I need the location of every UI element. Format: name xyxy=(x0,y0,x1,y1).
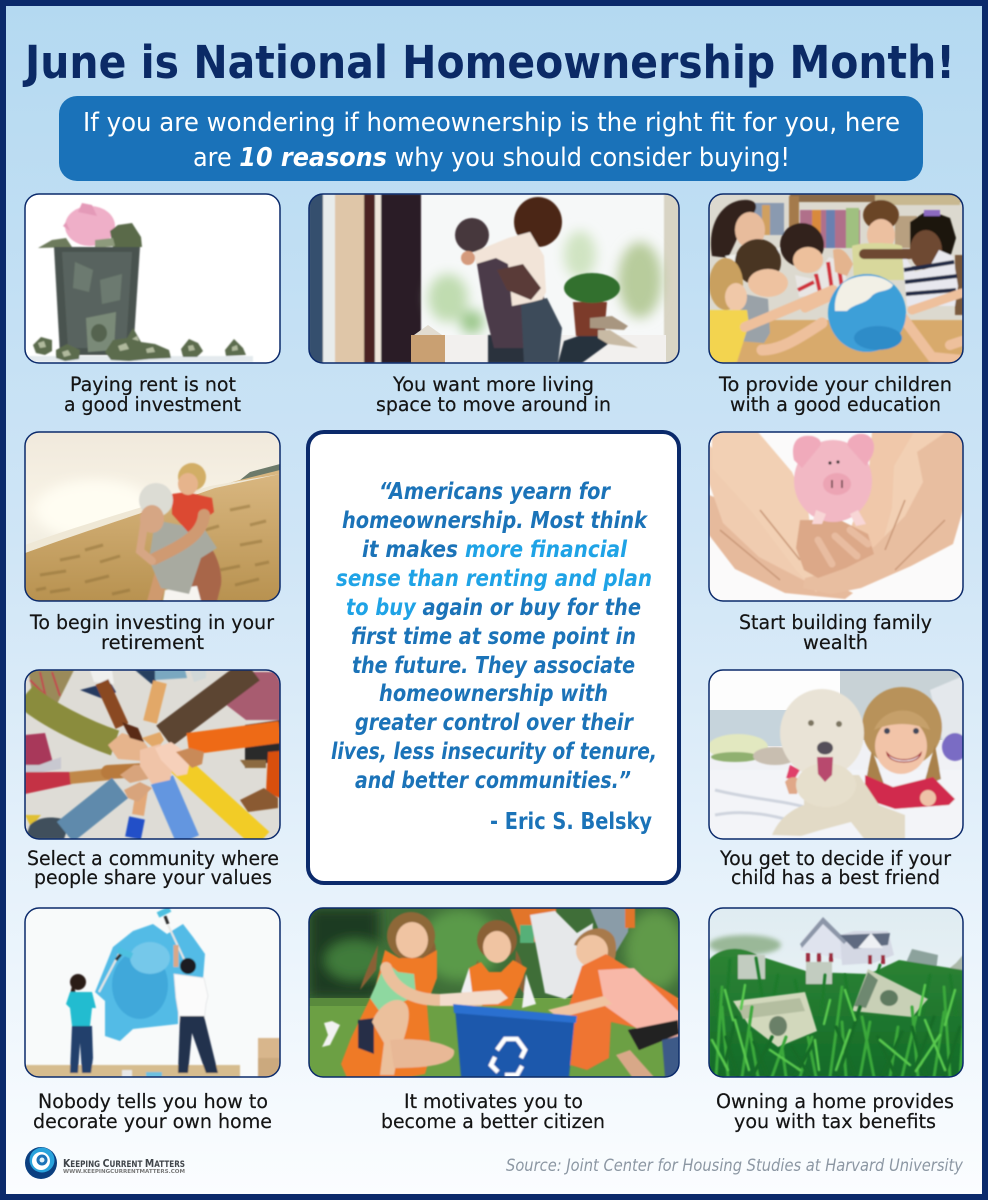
panel: rent xyxy=(25,194,280,416)
photo: girl and dog on a bed xyxy=(708,670,968,840)
caption xyxy=(719,847,952,889)
left boy xyxy=(735,239,781,285)
caption xyxy=(33,1090,272,1133)
panel: better citizen xyxy=(309,908,685,1133)
caption: people share your values xyxy=(34,866,272,889)
panel: decorate xyxy=(25,908,280,1133)
back boy xyxy=(863,200,899,230)
caption: Nobody tells you how to xyxy=(38,1090,268,1113)
photo: hands together in a circle xyxy=(25,670,280,840)
quote text: sense than renting and plan xyxy=(336,566,652,592)
caption xyxy=(716,1090,954,1133)
panel: tax benefits xyxy=(709,908,964,1133)
caption: wealth xyxy=(803,631,868,654)
caption: space to move around in xyxy=(376,393,611,416)
caption xyxy=(376,373,611,416)
panel: living space xyxy=(309,194,679,416)
caption: you with tax benefits xyxy=(734,1110,936,1133)
caption: You get to decide if your xyxy=(719,847,952,870)
girl xyxy=(910,210,956,258)
quote text xyxy=(331,479,657,794)
caption: child has a best friend xyxy=(731,866,940,889)
panel: community xyxy=(25,670,280,889)
panel: best friend xyxy=(708,670,968,889)
photo: children recycling xyxy=(309,908,685,1082)
woman xyxy=(711,200,756,258)
intro banner: If you are wondering if homeownership is the right fit for you, here xyxy=(83,108,900,138)
caption: retirement xyxy=(101,631,204,654)
caption: To provide your children xyxy=(718,373,952,396)
panel: quote xyxy=(308,432,679,883)
logo: Keeping Current Matters xyxy=(25,1147,185,1179)
quote text: homeownership. Most think xyxy=(342,508,648,534)
caption: decorate your own home xyxy=(33,1110,272,1133)
quote text: “Americans yearn for xyxy=(379,479,611,505)
intro banner xyxy=(59,96,923,181)
caption: Paying rent is not xyxy=(70,373,236,396)
icon: swirl xyxy=(25,1147,57,1179)
panel: retirement xyxy=(25,432,280,654)
quote text: homeownership with xyxy=(379,681,608,707)
photo: couple on a beach xyxy=(25,432,280,601)
photo: piggy bank in trash can xyxy=(25,194,280,363)
caption: Start building family xyxy=(739,611,932,634)
caption xyxy=(739,611,932,654)
caption xyxy=(718,373,952,416)
panel: education xyxy=(709,194,963,416)
photo: house and dollars in grass xyxy=(709,908,964,1077)
photo: piggy bank in hands xyxy=(709,432,963,601)
logo: Keeping Current Matters: WWW.KEEPINGCURRENTMATTERS.COM xyxy=(63,1169,185,1175)
logo: Keeping Current Matters: KEEPING CURRENT MATTERS xyxy=(63,1157,185,1170)
caption: a good investment xyxy=(64,393,241,416)
panel: family wealth xyxy=(709,432,963,654)
caption: To begin investing in your xyxy=(29,611,275,634)
caption: Owning a home provides xyxy=(716,1090,954,1113)
caption xyxy=(381,1090,605,1133)
quote text: first time at some point in xyxy=(351,624,636,650)
caption: with a good education xyxy=(730,393,941,416)
center boy xyxy=(780,223,824,267)
quote text: the future. They associate xyxy=(352,653,635,679)
photo: couple painting a wall blue xyxy=(25,908,280,1077)
caption: Select a community where xyxy=(27,847,279,870)
blond girl xyxy=(709,258,743,310)
quote text: and better communities.” xyxy=(355,768,631,794)
photo: children around a globe xyxy=(709,194,963,364)
intro banner: are 10 reasons why you should consider buying! xyxy=(193,143,790,173)
caption xyxy=(29,611,275,654)
quote text: greater control over their xyxy=(355,710,634,736)
caption: It motivates you to xyxy=(404,1090,583,1113)
caption xyxy=(64,373,241,416)
quote attribution: - Eric S. Belsky xyxy=(490,809,652,835)
quote text: it makes more financial xyxy=(362,537,628,563)
quote text: to buy again or buy for the xyxy=(346,595,641,621)
photo: couple embracing xyxy=(309,194,679,363)
caption: You want more living xyxy=(392,373,594,396)
caption xyxy=(27,847,279,889)
quote text: lives, less insecurity of tenure, xyxy=(331,739,657,765)
caption: become a better citizen xyxy=(381,1110,605,1133)
